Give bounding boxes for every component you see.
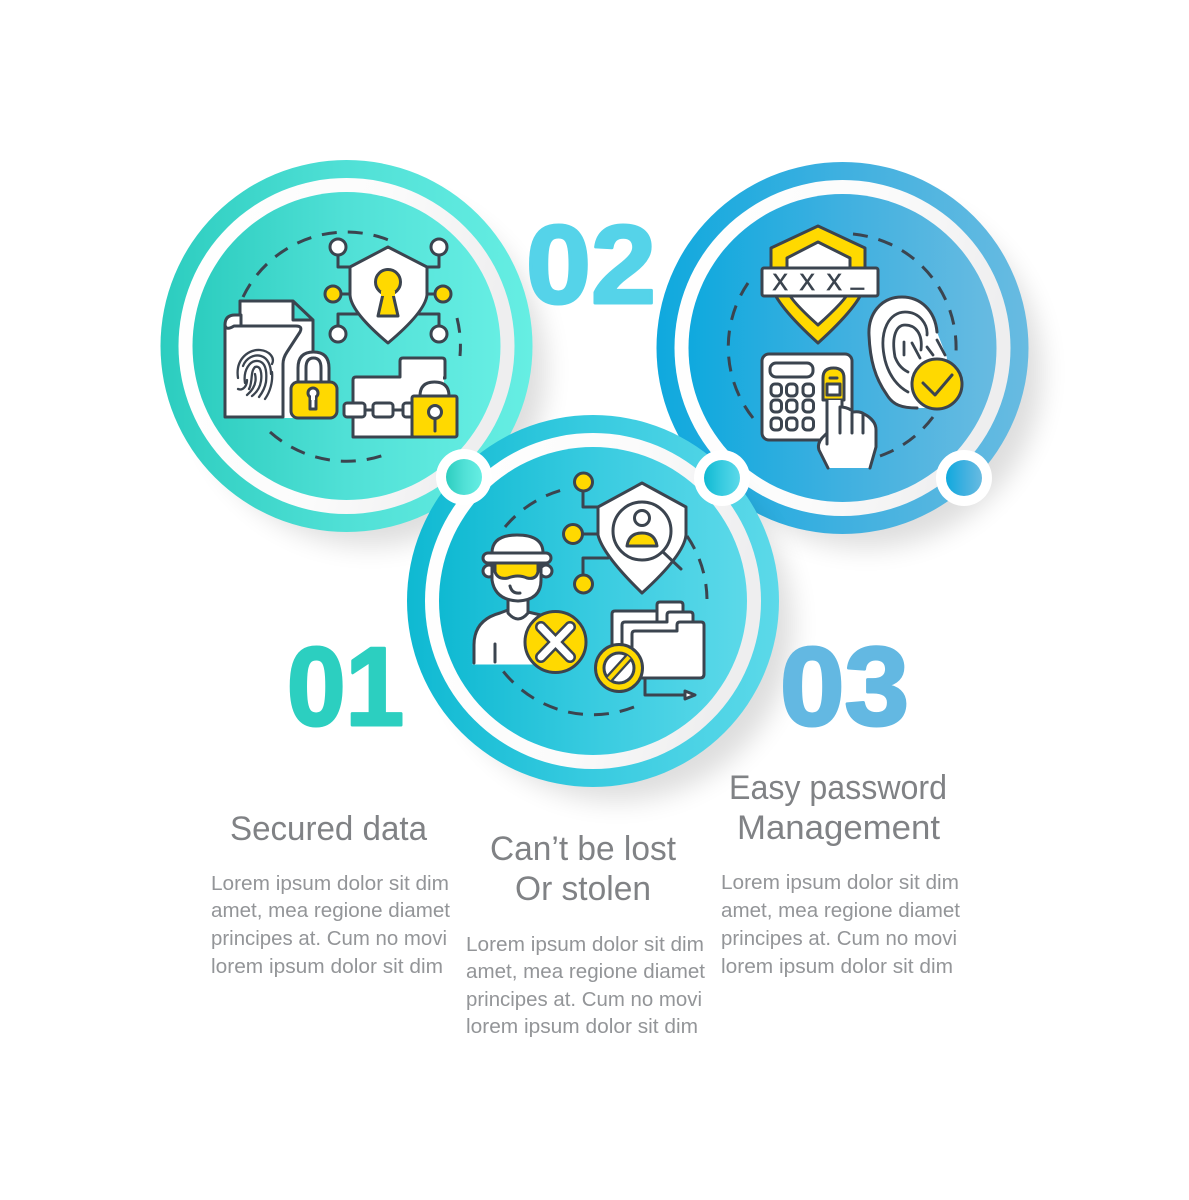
connector dot between 03 and 02: [694, 450, 750, 506]
heading: Or stolen: [515, 870, 651, 908]
icon group: password management: [728, 226, 962, 468]
text block: easy password: [721, 769, 960, 978]
panel: circle 01: [160, 160, 546, 546]
heading: Secured data: [230, 810, 427, 848]
heading: [490, 830, 677, 908]
body: principes at. Cum no movi: [466, 988, 702, 1011]
number 02: 02: [526, 203, 656, 327]
body: [721, 871, 960, 978]
icon group: theft prevention: [473, 473, 707, 715]
icon: locked folder: [344, 358, 457, 437]
icon: shield with password field: [762, 226, 878, 343]
password cursor: _: [850, 264, 865, 290]
icon: shield with keyhole and nodes: [325, 239, 451, 343]
body: [211, 872, 450, 978]
body: amet, mea regione diamet: [211, 899, 450, 922]
heading: Can’t be lost: [490, 830, 677, 868]
icon: fingerprint with check: [869, 297, 962, 409]
icon: pointing hand: [818, 400, 876, 468]
icon: yellow padlock: [291, 352, 337, 418]
body: amet, mea regione diamet: [721, 899, 960, 922]
body: Lorem ipsum dolor sit dim: [211, 872, 449, 895]
icon group: data protection: [225, 232, 460, 461]
dashed orbit 3: [503, 490, 707, 715]
text block: secured data: [211, 810, 450, 978]
body: lorem ipsum dolor sit dim: [466, 1015, 698, 1038]
end dot of circle 02: [936, 450, 992, 506]
connector dot between 01 and 03: [436, 449, 492, 505]
icon: blocked folders: [596, 602, 704, 699]
dashed orbit 2: [728, 234, 956, 456]
body: principes at. Cum no movi: [721, 927, 957, 950]
body: Lorem ipsum dolor sit dim: [721, 871, 959, 894]
icon: shield with magnifier and nodes: [564, 473, 686, 593]
body: [466, 933, 705, 1038]
number 01: 01: [287, 625, 404, 749]
icon: fingerprint document: [225, 301, 313, 418]
icon: thief with mask: [473, 535, 552, 664]
panel: circle 02: [656, 162, 1042, 548]
number 03: 03: [780, 625, 909, 749]
panel: circle 03: [407, 415, 793, 801]
dashed orbit 1: [243, 232, 460, 461]
password mask text: XXX: [772, 269, 842, 295]
body: lorem ipsum dolor sit dim: [211, 955, 443, 978]
heading: Easy password: [729, 769, 947, 807]
text block: can't be lost: [466, 830, 705, 1038]
body: amet, mea regione diamet: [466, 960, 705, 983]
body: lorem ipsum dolor sit dim: [721, 955, 953, 978]
heading: [729, 769, 947, 847]
icon: cross badge: [525, 612, 586, 672]
icon: keypad with finger scanner: [762, 354, 876, 468]
body: principes at. Cum no movi: [211, 927, 447, 950]
body: Lorem ipsum dolor sit dim: [466, 933, 704, 956]
heading: Management: [737, 809, 941, 847]
